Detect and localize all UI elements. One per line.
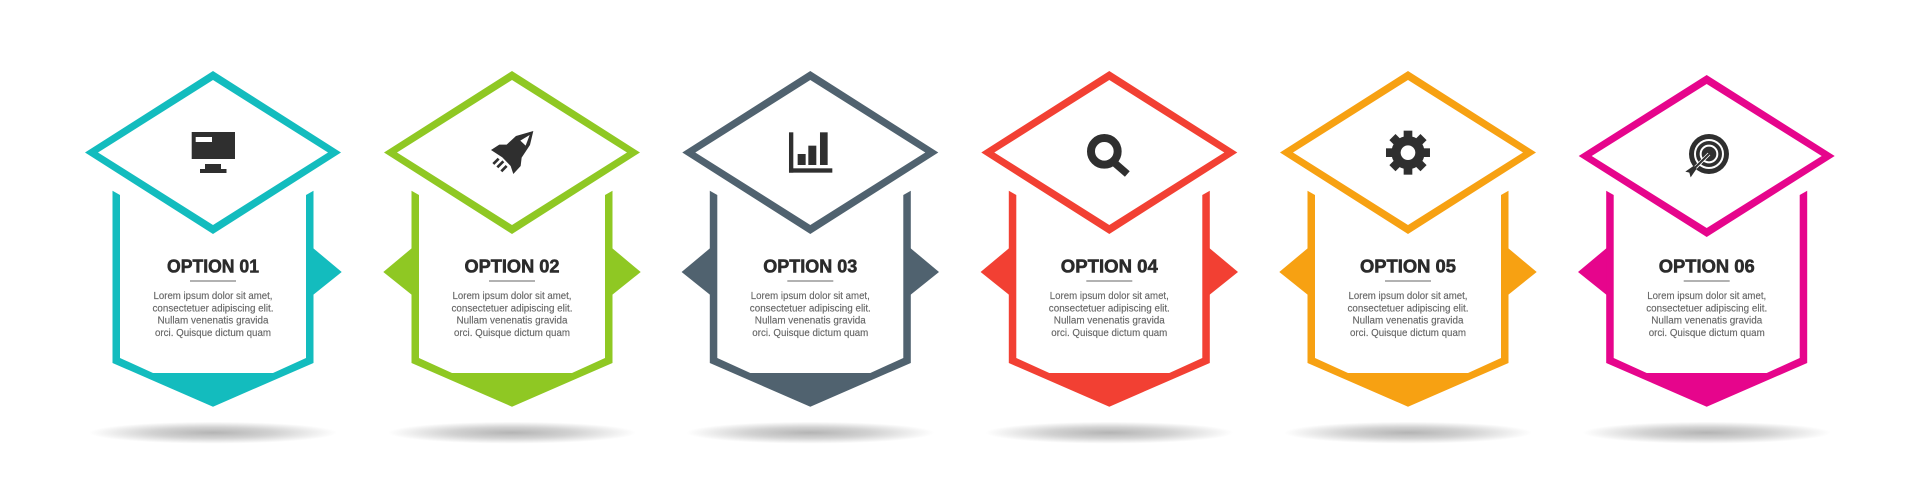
shadow 03 (686, 422, 934, 444)
icon: monitor (192, 132, 235, 173)
arrow left 04 (981, 248, 1009, 295)
option 04 panel (981, 71, 1238, 444)
text block 06: orci. Quisque dictum quam (1649, 327, 1765, 339)
heading 02: OPTION 02 (464, 257, 560, 277)
heading 06: OPTION 06 (1659, 257, 1755, 277)
text block 01: Lorem ipsum dolor sit amet, (154, 290, 272, 302)
icon: bar chart (789, 132, 832, 173)
text block 04 (1049, 290, 1170, 339)
text block 06 (1646, 290, 1767, 339)
frame 04 (1009, 191, 1210, 407)
text block 03: Nullam venenatis gravida (755, 315, 866, 327)
heading 01: OPTION 01 (167, 257, 259, 277)
arrow right 01 (313, 248, 342, 295)
underline 06 (1684, 280, 1730, 282)
text block 01 (152, 290, 274, 339)
icon: target (1685, 134, 1729, 177)
icon: rocket (491, 131, 533, 174)
underline 01 (190, 280, 236, 282)
text block 06: consectetuer adipiscing elit. (1646, 302, 1767, 314)
heading 05: OPTION 05 (1360, 257, 1456, 277)
arrow right 02 (612, 248, 641, 295)
text block 05 (1348, 290, 1468, 339)
frame 01 (112, 191, 314, 407)
diamond 06 (1579, 75, 1835, 237)
underline 05 (1385, 280, 1431, 282)
text block 01: consectetuer adipiscing elit. (152, 302, 274, 314)
heading 03: OPTION 03 (763, 257, 857, 277)
arrow left 02 (383, 248, 412, 295)
heading 04: OPTION 04 (1061, 257, 1158, 277)
shadow 06 (1583, 422, 1831, 444)
shadow 05 (1284, 422, 1532, 444)
text block 04: orci. Quisque dictum quam (1051, 327, 1168, 339)
frame 05 (1308, 191, 1508, 407)
text block 02: consectetuer adipiscing elit. (452, 302, 572, 314)
text block 01: Nullam venenatis gravida (158, 315, 269, 327)
icon: magnifier (1091, 138, 1127, 174)
option 02 panel (383, 71, 641, 444)
text block 02: Nullam venenatis gravida (456, 315, 568, 327)
text block 01: orci. Quisque dictum quam (155, 327, 271, 339)
option 06 panel (1578, 75, 1835, 444)
text block 05: Lorem ipsum dolor sit amet, (1348, 290, 1468, 302)
text block 03: orci. Quisque dictum quam (752, 327, 869, 339)
text block 02: Lorem ipsum dolor sit amet, (452, 290, 572, 302)
option 03 panel (682, 71, 939, 444)
diamond 02 (384, 71, 640, 234)
text block 02: orci. Quisque dictum quam (454, 327, 570, 339)
arrow right 04 (1209, 248, 1238, 295)
text block 03: Lorem ipsum dolor sit amet, (751, 290, 870, 302)
frame 02 (412, 191, 612, 407)
shadow 02 (388, 422, 636, 444)
shadow 04 (985, 422, 1233, 444)
text block 03 (750, 290, 871, 339)
option 05 panel (1279, 71, 1537, 444)
text block 05: Nullam venenatis gravida (1352, 315, 1464, 327)
arrow right 03 (910, 248, 939, 295)
arrow left 05 (1279, 248, 1308, 295)
icon: gear (1386, 131, 1430, 175)
text block 04: consectetuer adipiscing elit. (1049, 302, 1170, 314)
diamond 03 (682, 71, 938, 234)
arrow left 03 (682, 248, 710, 295)
shadow 01 (89, 422, 337, 444)
text block 03: consectetuer adipiscing elit. (750, 302, 871, 314)
option 01 panel (85, 71, 342, 444)
arrow right 05 (1508, 248, 1537, 295)
diamond 05 (1280, 71, 1536, 234)
text block 02 (452, 290, 572, 339)
diamond 01 (85, 71, 341, 234)
text block 06: Lorem ipsum dolor sit amet, (1647, 290, 1766, 302)
underline 02 (489, 280, 535, 282)
text block 04: Nullam venenatis gravida (1054, 315, 1165, 327)
diamond 04 (981, 71, 1237, 234)
frame 06 (1606, 191, 1807, 407)
text block 04: Lorem ipsum dolor sit amet, (1050, 290, 1169, 302)
text block 05: orci. Quisque dictum quam (1350, 327, 1466, 339)
underline 03 (787, 280, 833, 282)
underline 04 (1086, 280, 1132, 282)
frame 03 (710, 191, 911, 407)
text block 06: Nullam venenatis gravida (1651, 315, 1762, 327)
text block 05: consectetuer adipiscing elit. (1348, 302, 1468, 314)
arrow left 06 (1578, 248, 1607, 295)
